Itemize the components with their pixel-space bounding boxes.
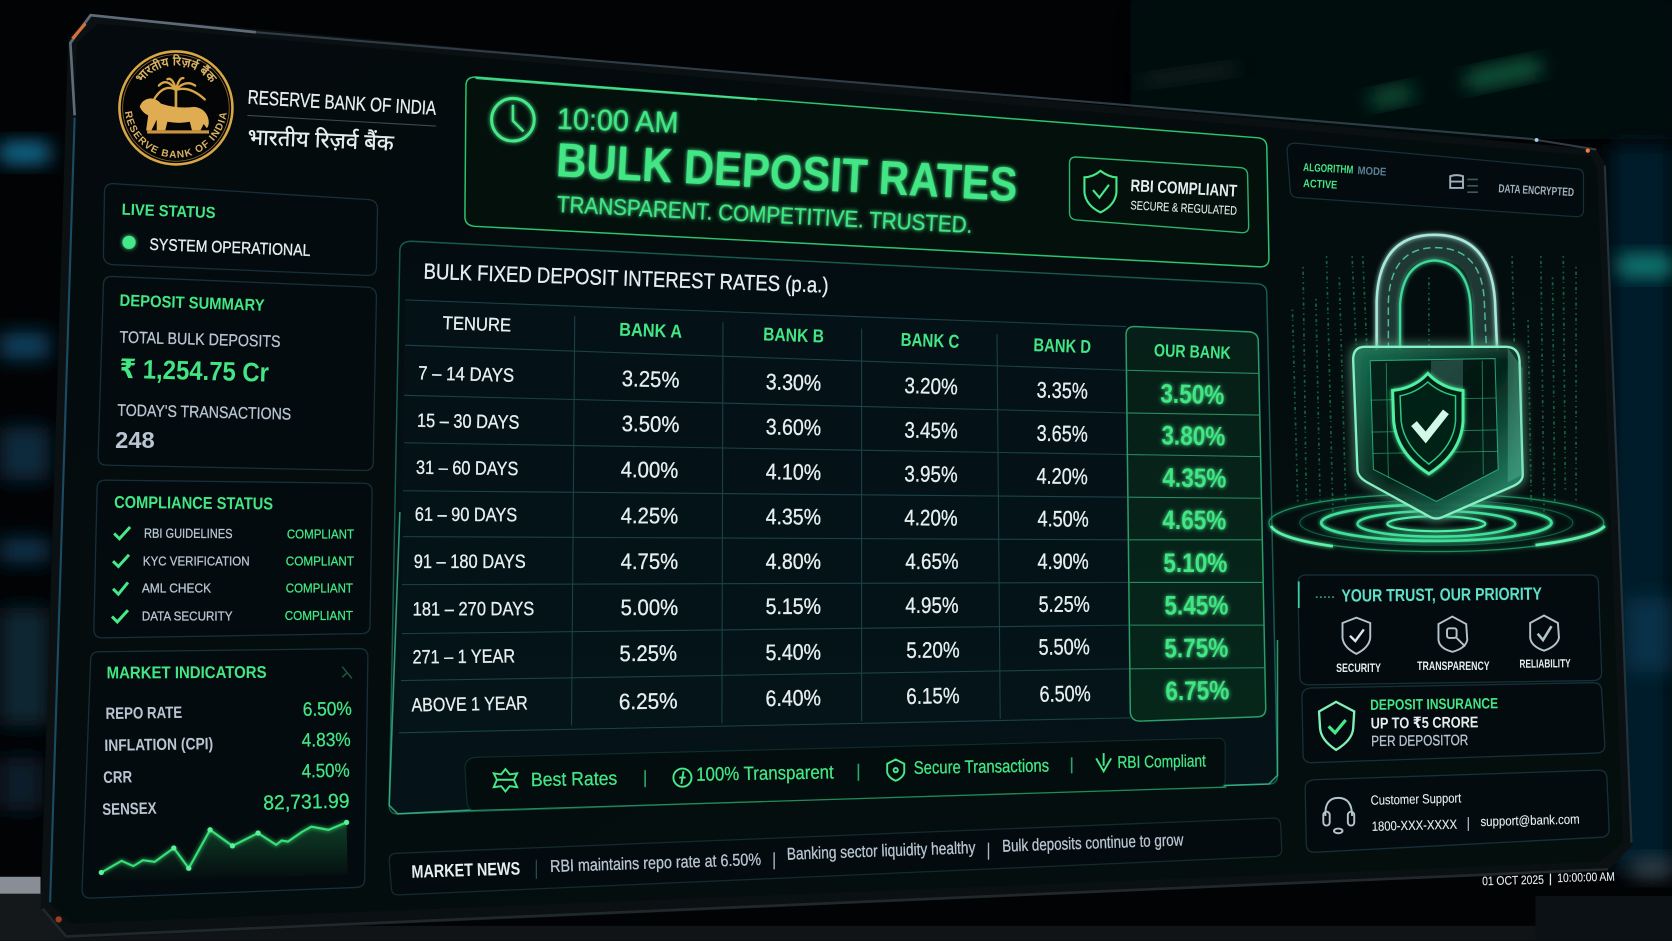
table row: 15–30 days: 3.80% (1161, 420, 1226, 452)
status bar: algorithm and encryption (1287, 143, 1583, 217)
panel: your trust, our priority: ..... (1315, 589, 1335, 599)
table row: 61–90 days: 61 – 90 DAYS (415, 505, 517, 526)
table row: 61–90 days: 4.25% (621, 503, 678, 528)
panel: deposit summary: DEPOSIT SUMMARY (119, 291, 265, 315)
table row: 271–1 year: 5.40% (765, 639, 821, 665)
panel: market indicators: MARKET INDICATORS (107, 663, 267, 682)
feature: best rates: Best Rates (531, 769, 617, 791)
feature: RBI compliant (1096, 751, 1206, 772)
table row: 271–1 year: 5.50% (1038, 634, 1090, 660)
compliance row: RBI guidelines (114, 526, 354, 542)
table row: above 1 year (411, 675, 1230, 716)
table title: BULK FIXED DEPOSIT INTEREST RATES (p.a.) (423, 259, 829, 298)
indicator: repo rate: 6.50% (303, 699, 352, 721)
illustration: padlock with shield (1353, 235, 1523, 518)
status bar: algorithm and encryption: ACTIVE (1303, 178, 1338, 192)
panel: customer support: Customer Support (1370, 790, 1462, 808)
hero banner (465, 77, 1269, 267)
table row: 181–270 days: 181 – 270 DAYS (413, 599, 534, 621)
table row: 7–14 days: 3.20% (904, 373, 958, 399)
table row: 7–14 days: 3.30% (766, 369, 822, 396)
feature: secure transactions (887, 756, 1049, 781)
indicator: inflation: INFLATION (CPI) (104, 734, 213, 755)
hero time: 10:00 AM (556, 103, 679, 140)
table row: 271–1 year: 5.75% (1164, 633, 1228, 663)
table header row: OUR BANK (1154, 340, 1231, 363)
compliance row: AML check: COMPLIANT (286, 581, 353, 596)
compliance row: KYC verification: KYC VERIFICATION (143, 553, 250, 568)
table header row: BANK B (763, 323, 824, 347)
table row: 61–90 days: 4.50% (1038, 506, 1089, 532)
badge: RBI compliant: RBI COMPLIANT (1130, 176, 1238, 201)
table row: 7–14 days: 3.50% (1160, 378, 1225, 410)
hero title: BULK DEPOSIT RATES (555, 134, 1019, 212)
panel: customer support: 1800-XXX-XXXX (1372, 817, 1457, 834)
table column: our bank highlight (1126, 327, 1266, 721)
table row: 61–90 days: 4.35% (766, 504, 821, 530)
table row: 271–1 year: 5.20% (906, 637, 960, 663)
feature: RBI compliant: RBI Compliant (1117, 751, 1206, 772)
table row: 91–180 days: 91 – 180 DAYS (414, 552, 526, 573)
table row: 91–180 days: 4.75% (621, 549, 678, 574)
table row: 15–30 days: 3.45% (904, 417, 958, 443)
trust item: reliability: RELIABILITY (1519, 657, 1571, 671)
table row: 271–1 year (413, 633, 1228, 669)
panel: deposit summary: TODAY'S TRANSACTIONS (117, 401, 291, 424)
sparkline chart (99, 820, 349, 881)
panel: live status: SYSTEM OPERATIONAL (149, 235, 311, 260)
icon: shield and check (1393, 373, 1463, 474)
trust item: security: SECURITY (1336, 662, 1381, 675)
panel: deposit insurance: UP TO ₹5 CRORE (1371, 714, 1479, 733)
table row: 31–60 days: 31 – 60 DAYS (416, 458, 518, 480)
bank name (247, 87, 437, 156)
indicator: inflation (104, 730, 351, 755)
compliance row: RBI guidelines: RBI GUIDELINES (144, 526, 233, 541)
table row: 181–270 days: 5.25% (1039, 592, 1090, 617)
RBI seal logo: भारतीय रिज़र्व बैंक (136, 54, 218, 82)
trust item: security (1336, 618, 1381, 675)
RBI seal logo: RESERVE BANK OF INDIA (125, 111, 227, 158)
indicator: sensex: SENSEX (102, 799, 157, 819)
icon: headset (1323, 798, 1354, 833)
data rain behind lock (1292, 256, 1576, 512)
trust item: reliability (1519, 616, 1571, 671)
panel: compliance status (94, 480, 372, 638)
table row: 15–30 days: 3.65% (1036, 421, 1088, 447)
icon: insurance shield (1319, 702, 1354, 750)
market news ticker: Bulk deposits continue to grow (1002, 830, 1184, 856)
timestamp: 10:00:00 AM (1557, 870, 1615, 885)
feature: secure transactions: Secure Transactions (914, 756, 1049, 778)
compliance row: AML check (113, 581, 353, 596)
panel: live status (103, 184, 377, 275)
market news ticker: Banking sector liquidity healthy (786, 838, 976, 864)
table row: 31–60 days: 4.10% (766, 459, 821, 485)
indicator: repo rate: REPO RATE (105, 703, 182, 723)
panel: deposit summary: ₹ 1,254.75 Cr (119, 354, 269, 388)
status bar: algorithm and encryption: MODE (1357, 165, 1387, 179)
badge: RBI compliant (1070, 157, 1249, 233)
compliance row: data security: DATA SECURITY (142, 608, 233, 623)
feature: 100% transparent: 100% Transparent (696, 762, 835, 786)
panel: compliance status: COMPLIANCE STATUS (114, 493, 273, 513)
table row: 31–60 days: 4.00% (621, 457, 679, 483)
panel: customer support (1305, 770, 1609, 852)
market news ticker: RBI maintains repo rate at 6.50% (550, 850, 761, 876)
table row: 15–30 days (417, 411, 1226, 452)
table row: 91–180 days: 5.10% (1163, 548, 1227, 578)
status bar: algorithm and encryption: DATA ENCRYPTED (1498, 182, 1574, 199)
indicator: sensex (102, 790, 350, 819)
table row: 91–180 days (414, 548, 1227, 578)
market news ticker: MARKET NEWS (411, 858, 520, 882)
panel: deposit summary: 248 (115, 427, 155, 453)
table row: 7–14 days (418, 363, 1225, 410)
table row: 31–60 days: 4.20% (1036, 463, 1088, 489)
table header row: BANK C (900, 329, 960, 352)
table row: 31–60 days: 4.35% (1162, 463, 1227, 493)
table row: 91–180 days: 4.80% (766, 549, 821, 574)
indicator: CRR: CRR (103, 767, 132, 787)
RBI seal logo (118, 50, 234, 166)
table row: 15–30 days: 15 – 30 DAYS (417, 411, 520, 434)
table row: 15–30 days: 3.60% (766, 414, 822, 440)
panel: deposit insurance (1302, 683, 1605, 763)
status bar: algorithm and encryption: ALGORITHM (1303, 162, 1354, 176)
trust item: transparency (1417, 617, 1490, 673)
table row: 31–60 days: 3.95% (904, 461, 958, 487)
table row: 181–270 days: 5.45% (1164, 590, 1228, 621)
panel: live status: LIVE STATUS (121, 202, 216, 222)
indicator: CRR (103, 761, 350, 787)
table grid (399, 300, 1130, 733)
table row: 61–90 days (415, 503, 1226, 535)
timestamp: 01 OCT 2025 (1482, 873, 1544, 888)
timestamp (1482, 870, 1615, 888)
table header row: BANK D (1033, 334, 1091, 357)
panel: rate table (389, 241, 1277, 814)
table row: 181–270 days (413, 590, 1228, 621)
table row: 7–14 days: 3.35% (1036, 377, 1088, 404)
panel: deposit insurance: DEPOSIT INSURANCE (1370, 695, 1498, 714)
table header row (442, 312, 1231, 363)
bank name: भारतीय रिज़र्व बैंक (247, 123, 395, 156)
table row: above 1 year: 6.50% (1039, 681, 1091, 707)
illustration: rings under lock (1269, 494, 1605, 552)
icon: clock (492, 98, 534, 141)
indicator: CRR: 4.50% (301, 761, 350, 783)
compliance row: data security: COMPLIANT (285, 608, 353, 623)
compliance row: AML check: AML CHECK (142, 581, 211, 596)
table row: 7–14 days: 7 – 14 DAYS (418, 363, 514, 387)
badge: RBI compliant: SECURE & REGULATED (1130, 198, 1237, 218)
table row: 271–1 year: 5.25% (619, 641, 677, 666)
hero tagline: TRANSPARENT. COMPETITIVE. TRUSTED. (556, 191, 973, 238)
panel: market indicators (82, 649, 368, 898)
feature strip (465, 738, 1226, 811)
compliance row: data security (112, 608, 353, 623)
panel: your trust, our priority (1298, 575, 1602, 685)
table row: 7–14 days: 3.25% (622, 366, 680, 393)
table row: above 1 year: 6.15% (906, 683, 960, 709)
panel: your trust, our priority: YOUR TRUST, OUR PRIORITY (1341, 584, 1542, 606)
table row: 181–270 days: 5.15% (766, 594, 821, 619)
table row: 181–270 days: 4.95% (905, 593, 959, 618)
indicator: inflation: 4.83% (301, 730, 351, 752)
table row: above 1 year: ABOVE 1 YEAR (411, 693, 528, 716)
panel: customer support: support@bank.com (1480, 812, 1580, 829)
table row: 15–30 days: 3.50% (622, 411, 680, 437)
feature: best rates (494, 769, 617, 791)
panel: deposit summary: TOTAL BULK DEPOSITS (119, 328, 281, 351)
indicator: sensex: 82,731.99 (263, 790, 350, 815)
table row: 61–90 days: 4.65% (1162, 505, 1226, 535)
table row: above 1 year: 6.25% (619, 688, 678, 714)
compliance row: KYC verification (113, 553, 354, 568)
table row: 271–1 year: 271 – 1 YEAR (413, 646, 515, 669)
table row: 31–60 days (416, 457, 1227, 493)
table row: 91–180 days: 4.65% (905, 549, 959, 574)
table row: above 1 year: 6.75% (1165, 675, 1230, 706)
table header row: TENURE (442, 312, 511, 335)
bank name: RESERVE BANK OF INDIA (247, 87, 437, 120)
table row: above 1 year: 6.40% (765, 685, 821, 711)
market news ticker (389, 818, 1282, 895)
panel: deposit summary (98, 276, 376, 470)
table row: 181–270 days: 5.00% (621, 595, 678, 620)
compliance row: KYC verification: COMPLIANT (286, 553, 354, 568)
panel: deposit insurance: PER DEPOSITOR (1371, 732, 1469, 750)
indicator: repo rate (105, 699, 352, 723)
table header row: BANK A (619, 319, 682, 342)
trust item: transparency: TRANSPARENCY (1417, 660, 1490, 673)
table row: 91–180 days: 4.90% (1038, 549, 1089, 574)
table row: 61–90 days: 4.20% (904, 505, 958, 531)
compliance row: RBI guidelines: COMPLIANT (287, 527, 354, 542)
